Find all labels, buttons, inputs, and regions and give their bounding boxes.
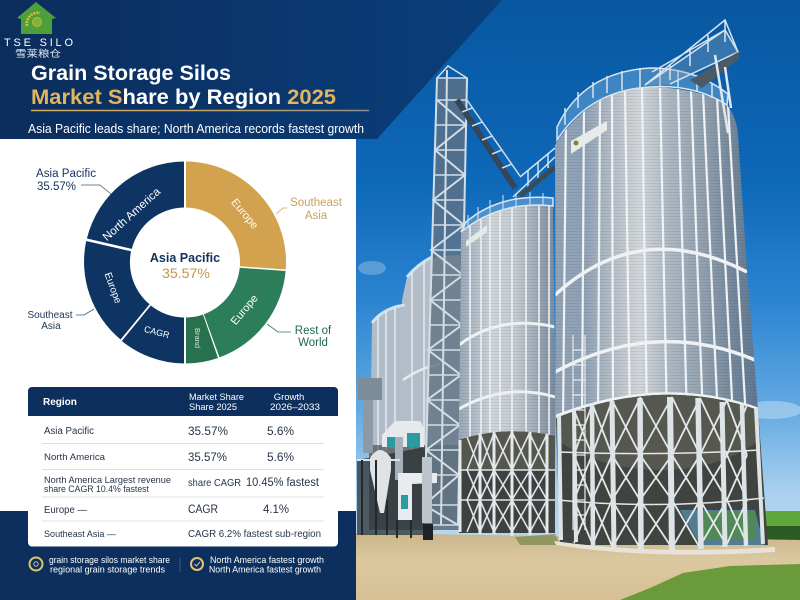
footer divider [179, 558, 181, 572]
segment labels: Europe [229, 293, 261, 328]
callout: Asia Pacific: 35.57% [37, 181, 76, 193]
cyclone and dust collector equipment [357, 378, 437, 540]
callout: Southeast Asia gold [276, 197, 343, 222]
table card [28, 387, 338, 546]
row: North America largest revenue: share CAGR 10.4% fastest [44, 484, 149, 494]
row: North America largest revenue [44, 475, 320, 494]
callout: Southeast Asia navy: Southeast [27, 310, 73, 321]
footer note: market share [30, 555, 170, 576]
segment labels: North America [101, 186, 164, 244]
title rule [31, 110, 369, 112]
row: Southeast Asia [44, 528, 321, 540]
big silo roof railing [557, 68, 728, 140]
footer note: market share: regional grain storage trends [50, 564, 165, 576]
table header: 2026–2033 [270, 402, 320, 413]
back silos [369, 255, 460, 530]
table header [28, 387, 338, 416]
icon: green house with wheat [17, 2, 56, 34]
segment labels: Brand [193, 328, 202, 348]
row: North America largest revenue: 10.45% fastest [246, 477, 320, 489]
logo wordmark: TSE SILO [4, 37, 73, 49]
silo nameplate [571, 121, 607, 154]
panel: navy header banner [0, 0, 502, 139]
walkway between silos [513, 148, 555, 197]
logo chinese name: 雪莱粮仓 [15, 48, 62, 60]
foreground grass [620, 564, 800, 600]
panel: white chart background [0, 139, 356, 511]
row: North America [44, 450, 294, 464]
concrete foundation ring [554, 541, 775, 555]
table header: Growth [274, 392, 304, 403]
callout: Rest of World [267, 324, 332, 349]
logo: TSE SILO [4, 2, 73, 60]
segment: small green [186, 315, 218, 364]
footer note: market share: grain storage silos market share [49, 555, 170, 566]
title: Market Share by Region 2025 [31, 86, 336, 109]
segment labels: CAGR [143, 324, 171, 340]
segment labels [101, 186, 261, 348]
row: North America largest revenue: share CAGR [188, 477, 241, 489]
segment: Europe green [204, 268, 286, 357]
row: Europe [44, 504, 289, 516]
title [31, 62, 336, 109]
footer note: fastest growth: North America fastest growth [210, 555, 324, 566]
row: Europe: Europe — [44, 505, 87, 516]
field and grass on the horizon [700, 511, 800, 548]
callout: Southeast Asia navy: Asia [41, 321, 61, 332]
row: Asia Pacific [44, 424, 294, 438]
table header: Share 2025 [189, 402, 237, 413]
callout: Asia Pacific: Asia Pacific [36, 168, 96, 180]
table: regional share and growth [28, 387, 338, 546]
subtitle: Asia Pacific leads share; North America records fastest growth [28, 122, 364, 136]
table header: Region [43, 397, 77, 408]
center label: Asia Pacific [150, 251, 220, 265]
icon: gold badge [30, 558, 42, 570]
center label [150, 251, 220, 281]
segment: CAGR navy [122, 306, 184, 364]
silo ladder [573, 335, 585, 530]
big silo legs [556, 335, 768, 550]
icon: gold check badge [191, 558, 203, 570]
middle silo legs [459, 431, 555, 536]
row: Europe: CAGR [188, 504, 218, 516]
row: Asia Pacific: 35.57% [188, 424, 228, 438]
panel: navy footer background [0, 511, 356, 600]
row: Asia Pacific: Asia Pacific [44, 426, 94, 437]
segment: Europe gold [186, 162, 286, 270]
row: Asia Pacific: 5.6% [267, 424, 294, 438]
sandy ground [356, 533, 800, 600]
donut chart [84, 162, 286, 364]
callout: Southeast Asia navy [27, 309, 94, 332]
callout: Asia Pacific [36, 168, 111, 194]
inclined conveyor [457, 100, 520, 188]
row: Southeast Asia: Southeast Asia — [44, 529, 116, 540]
row: North America largest revenue: North America Largest revenue [44, 475, 171, 485]
title: Grain Storage Silos [31, 62, 231, 85]
segment labels: Europe [102, 271, 123, 306]
segment: Europe navy [84, 241, 150, 340]
upper walkway platform [645, 20, 740, 133]
row: Southeast Asia: CAGR 6.2% fastest sub-region [188, 528, 321, 540]
callout: Rest of World: World [298, 337, 328, 349]
callout: Southeast Asia gold: Southeast [290, 197, 343, 209]
row: Europe: 4.1% [263, 504, 289, 516]
footer note: fastest growth [191, 555, 324, 576]
segment: North America navy [87, 162, 184, 249]
footer note: fastest growth: North America fastest growth [209, 564, 321, 576]
row: North America: 35.57% [188, 450, 227, 464]
table header: Market Share [189, 392, 244, 403]
row: North America: North America [44, 452, 106, 463]
row: North America: 5.6% [267, 450, 294, 464]
segment labels: Europe [228, 197, 260, 232]
callout: Rest of World: Rest of [295, 325, 332, 337]
photo: grain silos against blue sky [340, 0, 800, 600]
center label: 35.57% [162, 265, 210, 281]
callout: Southeast Asia gold: Asia [305, 210, 328, 222]
elevator tower [424, 66, 467, 525]
middle silo [457, 192, 555, 440]
big silo [554, 87, 758, 420]
